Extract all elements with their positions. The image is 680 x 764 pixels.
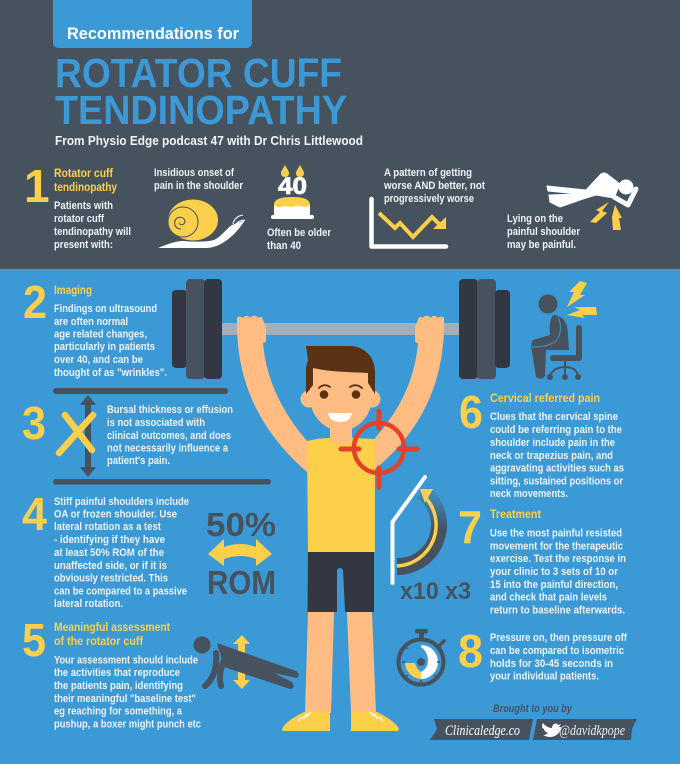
icon: 50% ROM graphic: [206, 506, 276, 601]
heading: rotator cuff tendinopathy: tendinopathy: [54, 182, 118, 194]
number 4: 4: [22, 488, 47, 540]
ears: [300, 390, 318, 408]
text: patients present with: rotator cuff: [54, 213, 104, 225]
text: insidious onset: [154, 167, 244, 192]
text: meaningful assessment: pushup, a boxer might punch etc: [54, 718, 201, 730]
number 7: 7: [458, 501, 482, 553]
text: stiff painful shoulders: lateral rotation.: [54, 598, 123, 610]
text: imaging findings: are often normal: [54, 316, 128, 328]
heading: rotator cuff tendinopathy: [54, 168, 118, 194]
text: treatment: exercise. Test the response in: [490, 553, 626, 565]
text: meaningful assessment: eg reaching for something, a: [54, 706, 183, 718]
text: imaging findings: Findings on ultrasound: [54, 303, 157, 315]
text: patients present with: present with:: [54, 239, 113, 251]
text: treatment: return to baseline afterwards.: [490, 604, 625, 616]
text: cervical referred pain: [490, 411, 624, 500]
icon: birthday cake with 40: 40: [278, 173, 307, 200]
divider bar two: [53, 479, 271, 484]
icon: resisted rotation arc: x10 x3: [400, 578, 471, 605]
text: imaging findings: thought of as "wrinkles".: [54, 367, 167, 379]
text: meaningful assessment: Your assessment should include: [54, 654, 198, 666]
text: bursal thickness: Bursal thickness or effusion: [107, 404, 233, 416]
text: imaging findings: [54, 303, 167, 379]
text: meaningful assessment: the activities that reproduce: [54, 667, 180, 679]
text: imaging findings: particularly in patients: [54, 341, 155, 353]
text: cervical referred pain: shoulder include pain in the: [490, 437, 615, 449]
ribbon: twitter handle: @davidkpope: [559, 723, 625, 739]
heading: meaningful assessment: [54, 622, 170, 648]
heading tab: Recommendations for: Recommendations for: [67, 24, 239, 43]
icon: snail: [158, 200, 245, 248]
text: stiff painful shoulders: [54, 496, 189, 610]
icon: 50% ROM graphic: 50%: [206, 506, 276, 543]
text: meaningful assessment: the patients pain, identifying: [54, 680, 183, 692]
heading: cervical referred pain: Cervical referred pain: [490, 393, 600, 405]
text: pressure on pressure off: your individual patients.: [490, 670, 599, 682]
text: bursal thickness: patient's pain.: [107, 455, 170, 467]
ribbon: clinicaledge.co: Clinicaledge.co: [445, 723, 520, 739]
text: pressure on pressure off: holds for 30-45 seconds in: [490, 658, 613, 670]
heading: meaningful assessment: Meaningful assessment: [54, 622, 170, 634]
number 5: 5: [22, 614, 46, 666]
text: stiff painful shoulders: - identifying if they have: [54, 534, 165, 546]
heading tab: Recommendations for: [53, 0, 252, 48]
left arm: [237, 316, 308, 473]
text: pattern of getting worse and better: worse AND better, not: [383, 180, 485, 192]
laces: [298, 712, 383, 721]
hair: [306, 346, 375, 394]
text: imaging findings: age related changes,: [54, 328, 147, 340]
panel: dark header: [0, 0, 680, 269]
number 8: 8: [458, 625, 483, 677]
icon: line chart: [372, 199, 446, 246]
face: [310, 365, 372, 431]
number 2: 2: [23, 276, 47, 328]
text: stiff painful shoulders: Stiff painful shoulders include: [54, 496, 189, 508]
text: treatment: movement for the therapeutic: [490, 540, 623, 552]
icon: seated person with neck pain: [531, 281, 597, 380]
text: patients present with: [54, 200, 131, 251]
shirt: [307, 438, 375, 552]
shorts: [308, 552, 374, 612]
text: patients present with: Patients with: [54, 200, 113, 212]
subtitle: From Physio Edge podcast 47 with Dr Chris Littlewood: [55, 133, 363, 148]
text: pattern of getting worse and better: A pattern of getting: [384, 167, 472, 179]
text: cervical referred pain: could be referring pain to the: [490, 424, 622, 436]
text: treatment: 15 into the painful direction,: [490, 579, 618, 591]
number 1: 1: [24, 160, 50, 212]
text: stiff painful shoulders: at least 50% ROM of the: [54, 547, 164, 559]
text: often older than 40: [267, 227, 332, 252]
title: TENDINOPATHY: [55, 87, 347, 133]
illustration: weightlifter figure: [237, 316, 444, 731]
eyes: [320, 390, 328, 399]
divider bar one: [53, 388, 228, 394]
text: pressure on pressure off: Pressure on, then pressure off: [490, 632, 627, 644]
eyebrows: [319, 385, 362, 388]
text: brought to you by: Brought to you by: [493, 703, 573, 715]
legs: [305, 612, 376, 713]
number 6: 6: [459, 386, 483, 438]
text: imaging findings: over 40, and can be: [54, 354, 143, 366]
ribbon: twitter handle: [533, 719, 637, 740]
shoes: [282, 712, 399, 731]
title: [55, 50, 347, 133]
text: treatment: and check that pain levels: [490, 592, 607, 604]
text: pressure on pressure off: can be compared to isometric: [490, 645, 624, 657]
text: cervical referred pain: sitting, sustained positions or: [490, 476, 624, 488]
icon: bird: [542, 723, 561, 737]
text: cervical referred pain: aggravating activities such as: [490, 463, 624, 475]
text: stiff painful shoulders: unaffected side, or if it is: [54, 560, 167, 572]
text: bursal thickness: clinical outcomes, and does: [107, 430, 231, 442]
text: cervical referred pain: neck movements.: [490, 488, 568, 500]
title: ROTATOR CUFF: [55, 50, 342, 96]
heading: imaging: Imaging: [54, 285, 92, 297]
text: lying on painful shoulder: may be painful.: [507, 239, 576, 251]
text: cervical referred pain: Clues that the cervical spine: [490, 411, 618, 423]
ribbon: clinicaledge.co: [430, 719, 533, 740]
text: stiff painful shoulders: lateral rotation as a test: [54, 521, 161, 533]
icon: birthday cake with 40: [271, 165, 314, 219]
heading: rotator cuff tendinopathy: Rotator cuff: [54, 168, 113, 180]
text: stiff painful shoulders: OA or frozen shoulder. Use: [54, 508, 177, 520]
text: lying on painful shoulder: Lying on the: [507, 213, 563, 225]
text: treatment: Use the most painful resisted: [490, 528, 622, 540]
illustration: barbell: [172, 279, 510, 379]
text: pattern of getting worse and better: [383, 167, 485, 205]
text: stiff painful shoulders: can be compared to a passive: [54, 586, 187, 598]
text: pattern of getting worse and better: progressively worse: [384, 193, 474, 205]
text: bursal thickness: [107, 404, 233, 467]
text: treatment: [490, 528, 626, 616]
text: pressure on pressure off: [490, 632, 627, 682]
heading: treatment: Treatment: [490, 509, 541, 521]
icon: red target on shoulder: [341, 411, 417, 487]
text: insidious onset: Insidious onset of: [154, 167, 234, 179]
text: meaningful assessment: [54, 654, 201, 730]
text: stiff painful shoulders: obviously restricted. This: [54, 573, 168, 585]
icon: bursal thickness arrow with cross: [59, 395, 96, 477]
text: bursal thickness: is not associated with: [107, 417, 205, 429]
text: cervical referred pain: neck or trapezius pain, and: [490, 450, 613, 462]
text: often older than 40: than 40: [267, 240, 301, 252]
smile: [328, 413, 352, 422]
right arm: [375, 316, 444, 469]
text: lying on painful shoulder: [507, 213, 581, 251]
text: patients present with: tendinopathy will: [54, 226, 131, 238]
neck: [330, 420, 352, 450]
text: insidious onset: pain in the shoulder: [154, 180, 244, 192]
heading: meaningful assessment: of the rotator cuff: [54, 636, 143, 648]
icon: resisted rotation arc: [392, 477, 471, 605]
text: often older than 40: Often be older: [267, 227, 332, 239]
text: lying on painful shoulder: painful shoulder: [507, 226, 581, 238]
icon: person lying on shoulder: [547, 173, 636, 230]
text: treatment: your clinic to 3 sets of 10 or: [490, 566, 619, 578]
text: bursal thickness: not necessarily influence a: [107, 442, 229, 454]
icon: 50% ROM graphic: ROM: [207, 564, 276, 601]
icon: stopwatch: [398, 629, 444, 684]
icon: pushup figure with arrow: [194, 635, 299, 689]
text: meaningful assessment: their meaningful "baseline test": [54, 693, 196, 705]
number 3: 3: [22, 397, 46, 449]
